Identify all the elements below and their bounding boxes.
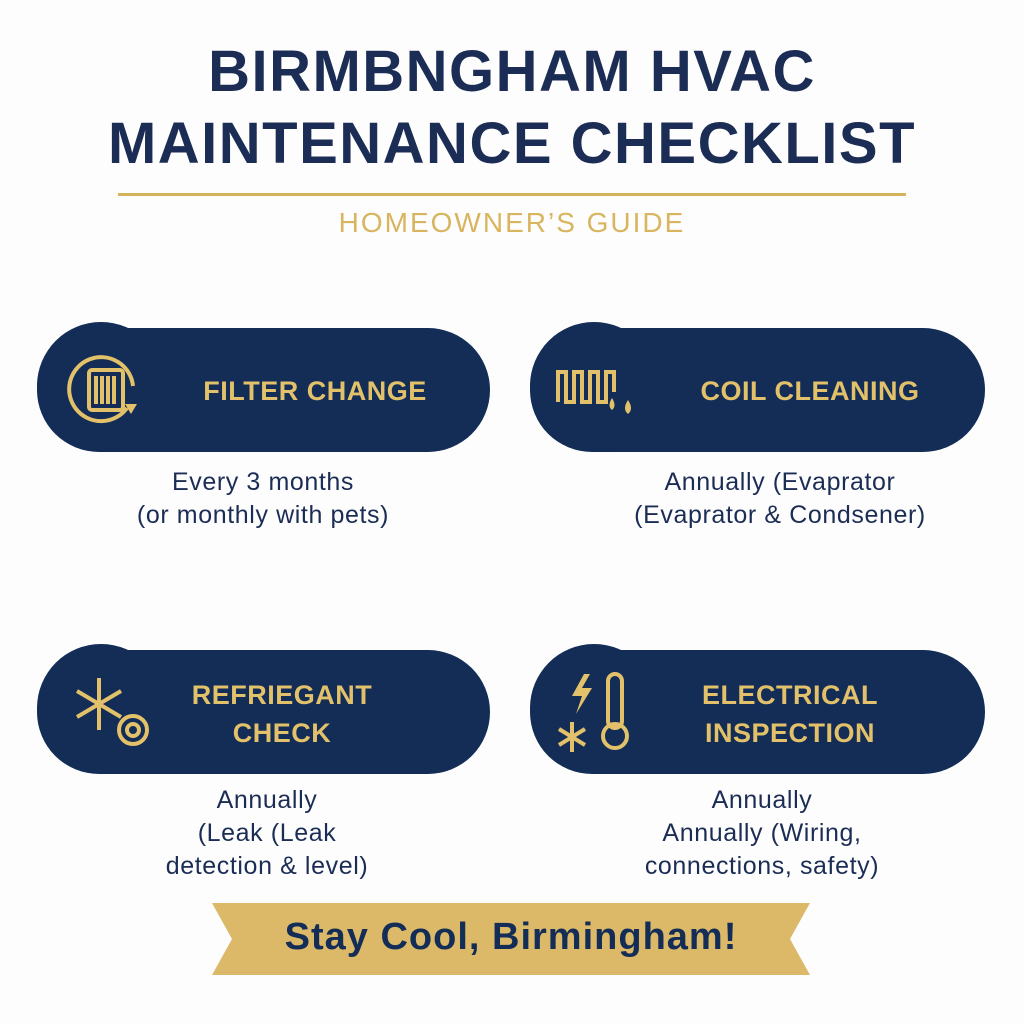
heading: ELECTRICAL (702, 680, 878, 710)
icon: bolt and thermometer (558, 672, 629, 752)
text: refrigerant (166, 786, 368, 880)
heading: REFRIEGANT (192, 680, 372, 710)
heading (192, 680, 372, 748)
text: filter: Every 3 months (172, 468, 354, 496)
text: refrigerant: detection & level) (166, 852, 368, 880)
text: electrical: Annually (712, 786, 812, 814)
subtitle: HOMEOWNER’S GUIDE (339, 207, 685, 238)
title: BIRMBNGHAM HVAC (208, 39, 816, 104)
panel: coil cleaning (530, 322, 985, 452)
icon: coil (556, 370, 631, 414)
text: electrical: connections, safety) (645, 852, 879, 880)
panel: electrical (530, 644, 985, 774)
text: filter: (or monthly with pets) (137, 501, 389, 529)
text: electrical: Annually (Wiring, (662, 819, 862, 847)
banner: Stay Cool, Birmingham! (285, 916, 737, 958)
text: electrical (645, 786, 879, 880)
text: coil (634, 468, 926, 529)
panel: refrigerant (37, 644, 490, 774)
title (108, 39, 916, 176)
text: coil: Annually (Evaprator (665, 468, 895, 496)
text: refrigerant: (Leak (Leak (198, 819, 336, 847)
heading: CHECK (233, 718, 331, 748)
text: refrigerant: Annually (217, 786, 317, 814)
icon: snowflake (76, 678, 149, 746)
panel: filter change (37, 322, 490, 452)
text: filter (137, 468, 389, 529)
icon: filter (67, 355, 137, 424)
heading: COIL CLEANING (700, 376, 920, 406)
heading (702, 680, 878, 748)
banner (212, 903, 810, 975)
title: MAINTENANCE CHECKLIST (108, 111, 916, 176)
heading: INSPECTION (705, 718, 875, 748)
heading: FILTER CHANGE (203, 376, 427, 406)
text: coil: (Evaprator & Condsener) (634, 501, 926, 529)
